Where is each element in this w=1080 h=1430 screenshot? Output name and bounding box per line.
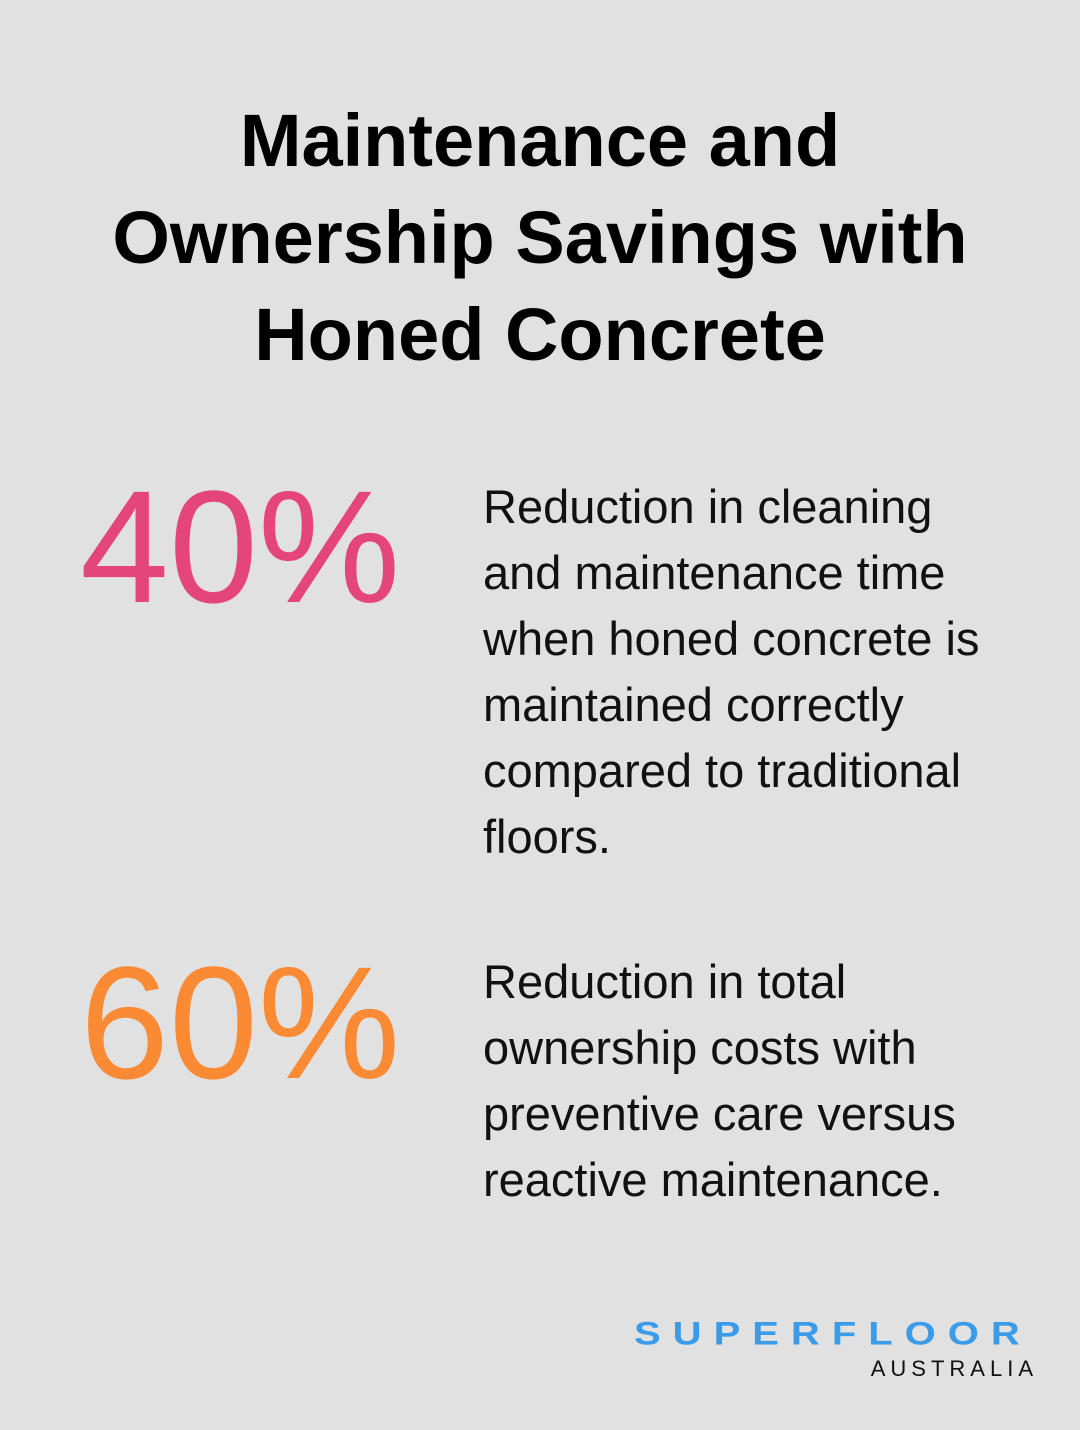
title: Ownership Savings with bbox=[112, 196, 968, 279]
description: 40%: Reduction in cleaning bbox=[483, 480, 932, 533]
description: 40%: maintained correctly bbox=[483, 678, 904, 731]
logo: SUPERFLOOR bbox=[634, 1316, 1032, 1352]
logo: AUSTRALIA bbox=[871, 1356, 1038, 1381]
stat: 40%: 40% bbox=[80, 457, 400, 636]
stat: 60%: 60% bbox=[80, 933, 400, 1112]
title: Maintenance and bbox=[240, 99, 840, 182]
title: Honed Concrete bbox=[254, 293, 826, 376]
description: 40%: when honed concrete is bbox=[483, 612, 979, 665]
description: 60%: preventive care versus bbox=[483, 1087, 956, 1140]
description: 40%: and maintenance time bbox=[483, 546, 945, 599]
title bbox=[112, 99, 968, 376]
description: 40% bbox=[483, 480, 979, 863]
description: 40%: floors. bbox=[483, 810, 611, 863]
description: 60%: Reduction in total bbox=[483, 955, 846, 1008]
description: 60%: ownership costs with bbox=[483, 1021, 917, 1074]
logo bbox=[634, 1316, 1038, 1381]
description: 60% bbox=[483, 955, 956, 1206]
description: 40%: compared to traditional bbox=[483, 744, 961, 797]
description: 60%: reactive maintenance. bbox=[483, 1153, 943, 1206]
